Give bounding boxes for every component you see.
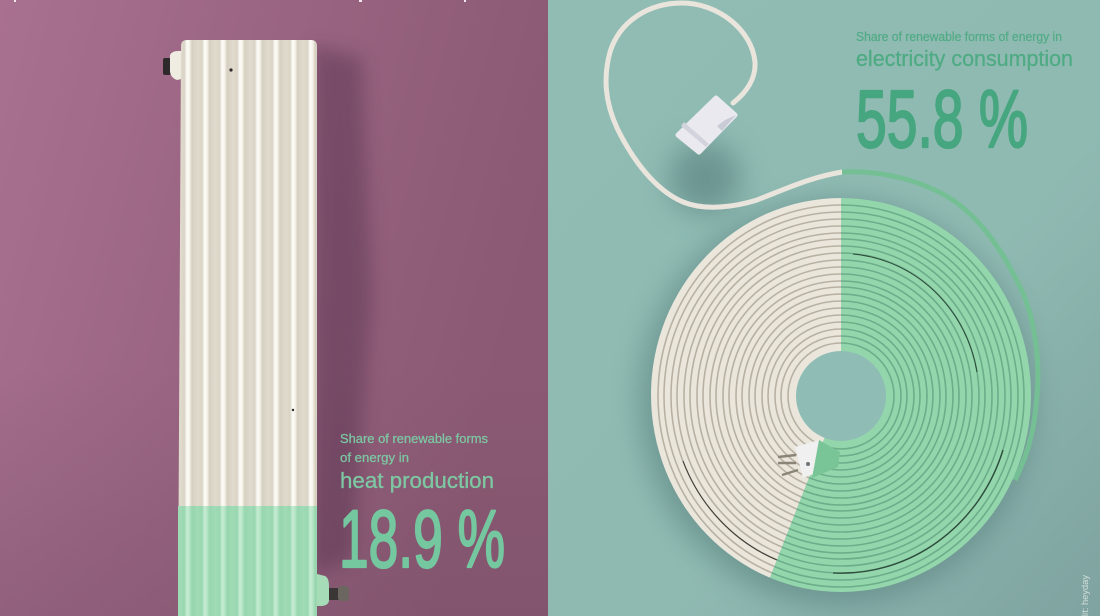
text block: electricity consumption: [856, 29, 1073, 165]
label: share of renewable forms: of energy in: [340, 450, 409, 465]
heading: electricity consumption: electricity consumption: [856, 46, 1073, 71]
icon: socket connector: [678, 98, 736, 152]
label: share of renewable forms: Share of renewable forms: [340, 431, 488, 446]
heading: heat production: heat production: [340, 468, 494, 493]
radiator white body: [178, 40, 317, 616]
icon: plug end: [778, 440, 840, 478]
panel: electricity consumption background: [548, 0, 1100, 616]
panel: heat production background: [0, 0, 548, 616]
cable: green section: [842, 172, 1038, 480]
coil green share: [770, 198, 1031, 592]
coil shadow: [639, 200, 1033, 604]
text block: heat production: [339, 431, 505, 585]
coil centre hole: [795, 350, 887, 442]
cropped title remnants: [14, 0, 466, 2]
radiator top-left valve: [163, 51, 186, 80]
icon: radiator: [163, 40, 349, 616]
radiator green filled portion 18.9%: [178, 506, 317, 616]
radiator shadow: [312, 45, 372, 575]
chart: coil as pie, 55.8% green: [651, 198, 1031, 592]
plug shadow: [669, 142, 741, 214]
radiator specks: [229, 68, 294, 411]
radiator bottom-right valve: [317, 574, 349, 606]
label: share of renewable forms: [340, 431, 488, 465]
cable: white section: [606, 3, 842, 207]
coil white share: [651, 198, 841, 578]
number: 18.9 %: 18.9 %: [339, 494, 505, 585]
label: share of renewable forms of energy in: Share of renewable forms of energy in: [856, 29, 1062, 44]
